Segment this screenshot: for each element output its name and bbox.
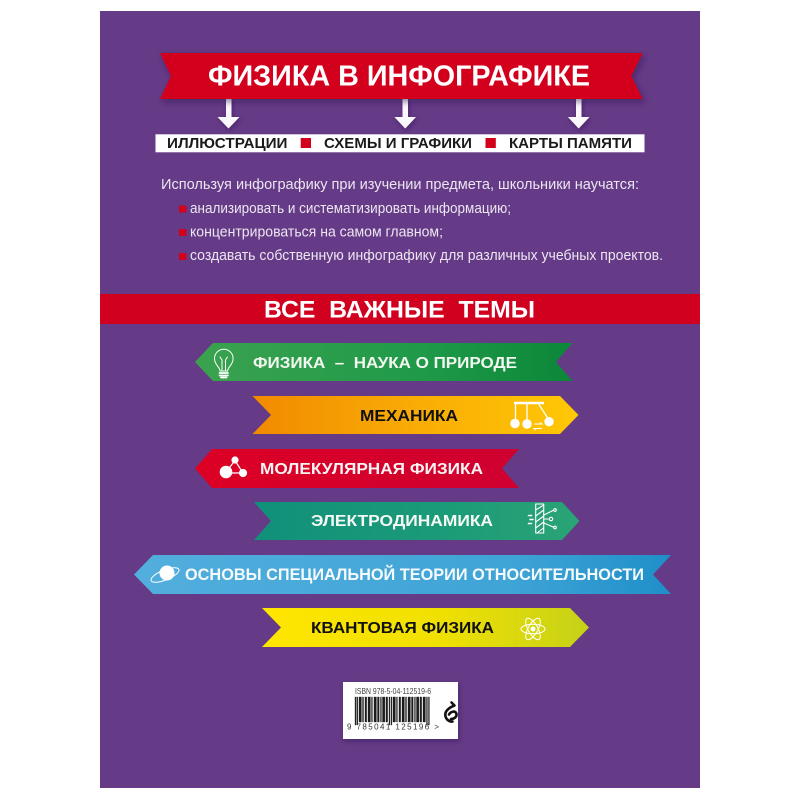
feature: illustrations: ИЛЛЮСТРАЦИИ bbox=[167, 136, 288, 152]
ribbon label: КВАНТОВАЯ ФИЗИКА bbox=[311, 620, 494, 637]
ribbon label: ОСНОВЫ СПЕЦИАЛЬНОЙ ТЕОРИИ ОТНОСИТЕЛЬНОСТИ bbox=[185, 565, 644, 584]
header group: title ribbon, arrows and strip bbox=[156, 53, 644, 152]
icon: molecule bbox=[220, 456, 247, 478]
barcode digits: 9 785041 125196 > bbox=[347, 722, 439, 732]
ribbon label: ЭЛЕКТРОДИНАМИКА bbox=[311, 513, 493, 530]
ribbon: molecular physics bbox=[195, 449, 519, 488]
intro text block bbox=[161, 177, 663, 264]
title ribbon bbox=[160, 53, 643, 99]
bullet one: анализировать и систематизировать информацию; bbox=[190, 201, 511, 217]
icon: charges passing through a plate bbox=[528, 504, 556, 533]
barcode panel bbox=[343, 682, 458, 739]
section heading: ВСЕ ВАЖНЫЕ ТЕМЫ bbox=[264, 296, 535, 324]
arrow: to memory maps bbox=[568, 99, 590, 128]
bullet three: создавать собственную инфографику для различных учебных проектов. bbox=[190, 248, 663, 264]
icon: planet with orbit bbox=[149, 565, 181, 585]
arrow: to illustrations bbox=[218, 99, 240, 128]
ribbon label: МЕХАНИКА bbox=[360, 408, 458, 425]
book back cover background bbox=[100, 11, 700, 788]
ribbon: electrodynamics bbox=[254, 502, 580, 540]
ribbon label: ФИЗИКА – НАУКА О ПРИРОДЕ bbox=[253, 355, 517, 372]
icon: newton's cradle bbox=[510, 403, 554, 430]
ribbon: mechanics bbox=[252, 396, 578, 434]
white strip with three features bbox=[156, 134, 644, 152]
icon: light bulb bbox=[214, 349, 233, 378]
ISBN number: ISBN 978-5-04-112519-6 bbox=[355, 687, 431, 696]
feature: memory maps: КАРТЫ ПАМЯТИ bbox=[509, 136, 632, 152]
bullet two: концентрироваться на самом главном; bbox=[190, 224, 443, 240]
barcode bars bbox=[355, 697, 429, 725]
icon: atom bbox=[521, 616, 545, 642]
intro sentence: Используя инфографику при изучении предмета, школьники научатся: bbox=[161, 177, 639, 193]
ribbon label: МОЛЕКУЛЯРНАЯ ФИЗИКА bbox=[260, 461, 483, 478]
section band bbox=[100, 294, 700, 324]
ribbon: physics - science of nature bbox=[195, 343, 572, 381]
icon: publisher logo bbox=[445, 702, 457, 722]
ribbon: quantum physics bbox=[262, 608, 589, 647]
feature: diagrams: СХЕМЫ И ГРАФИКИ bbox=[324, 136, 472, 152]
square separator bbox=[301, 138, 311, 148]
ribbon: special relativity bbox=[134, 555, 671, 594]
title text: ФИЗИКА В ИНФОГРАФИКЕ bbox=[208, 60, 590, 92]
square separator bbox=[486, 138, 496, 148]
arrow: to diagrams bbox=[394, 99, 416, 128]
